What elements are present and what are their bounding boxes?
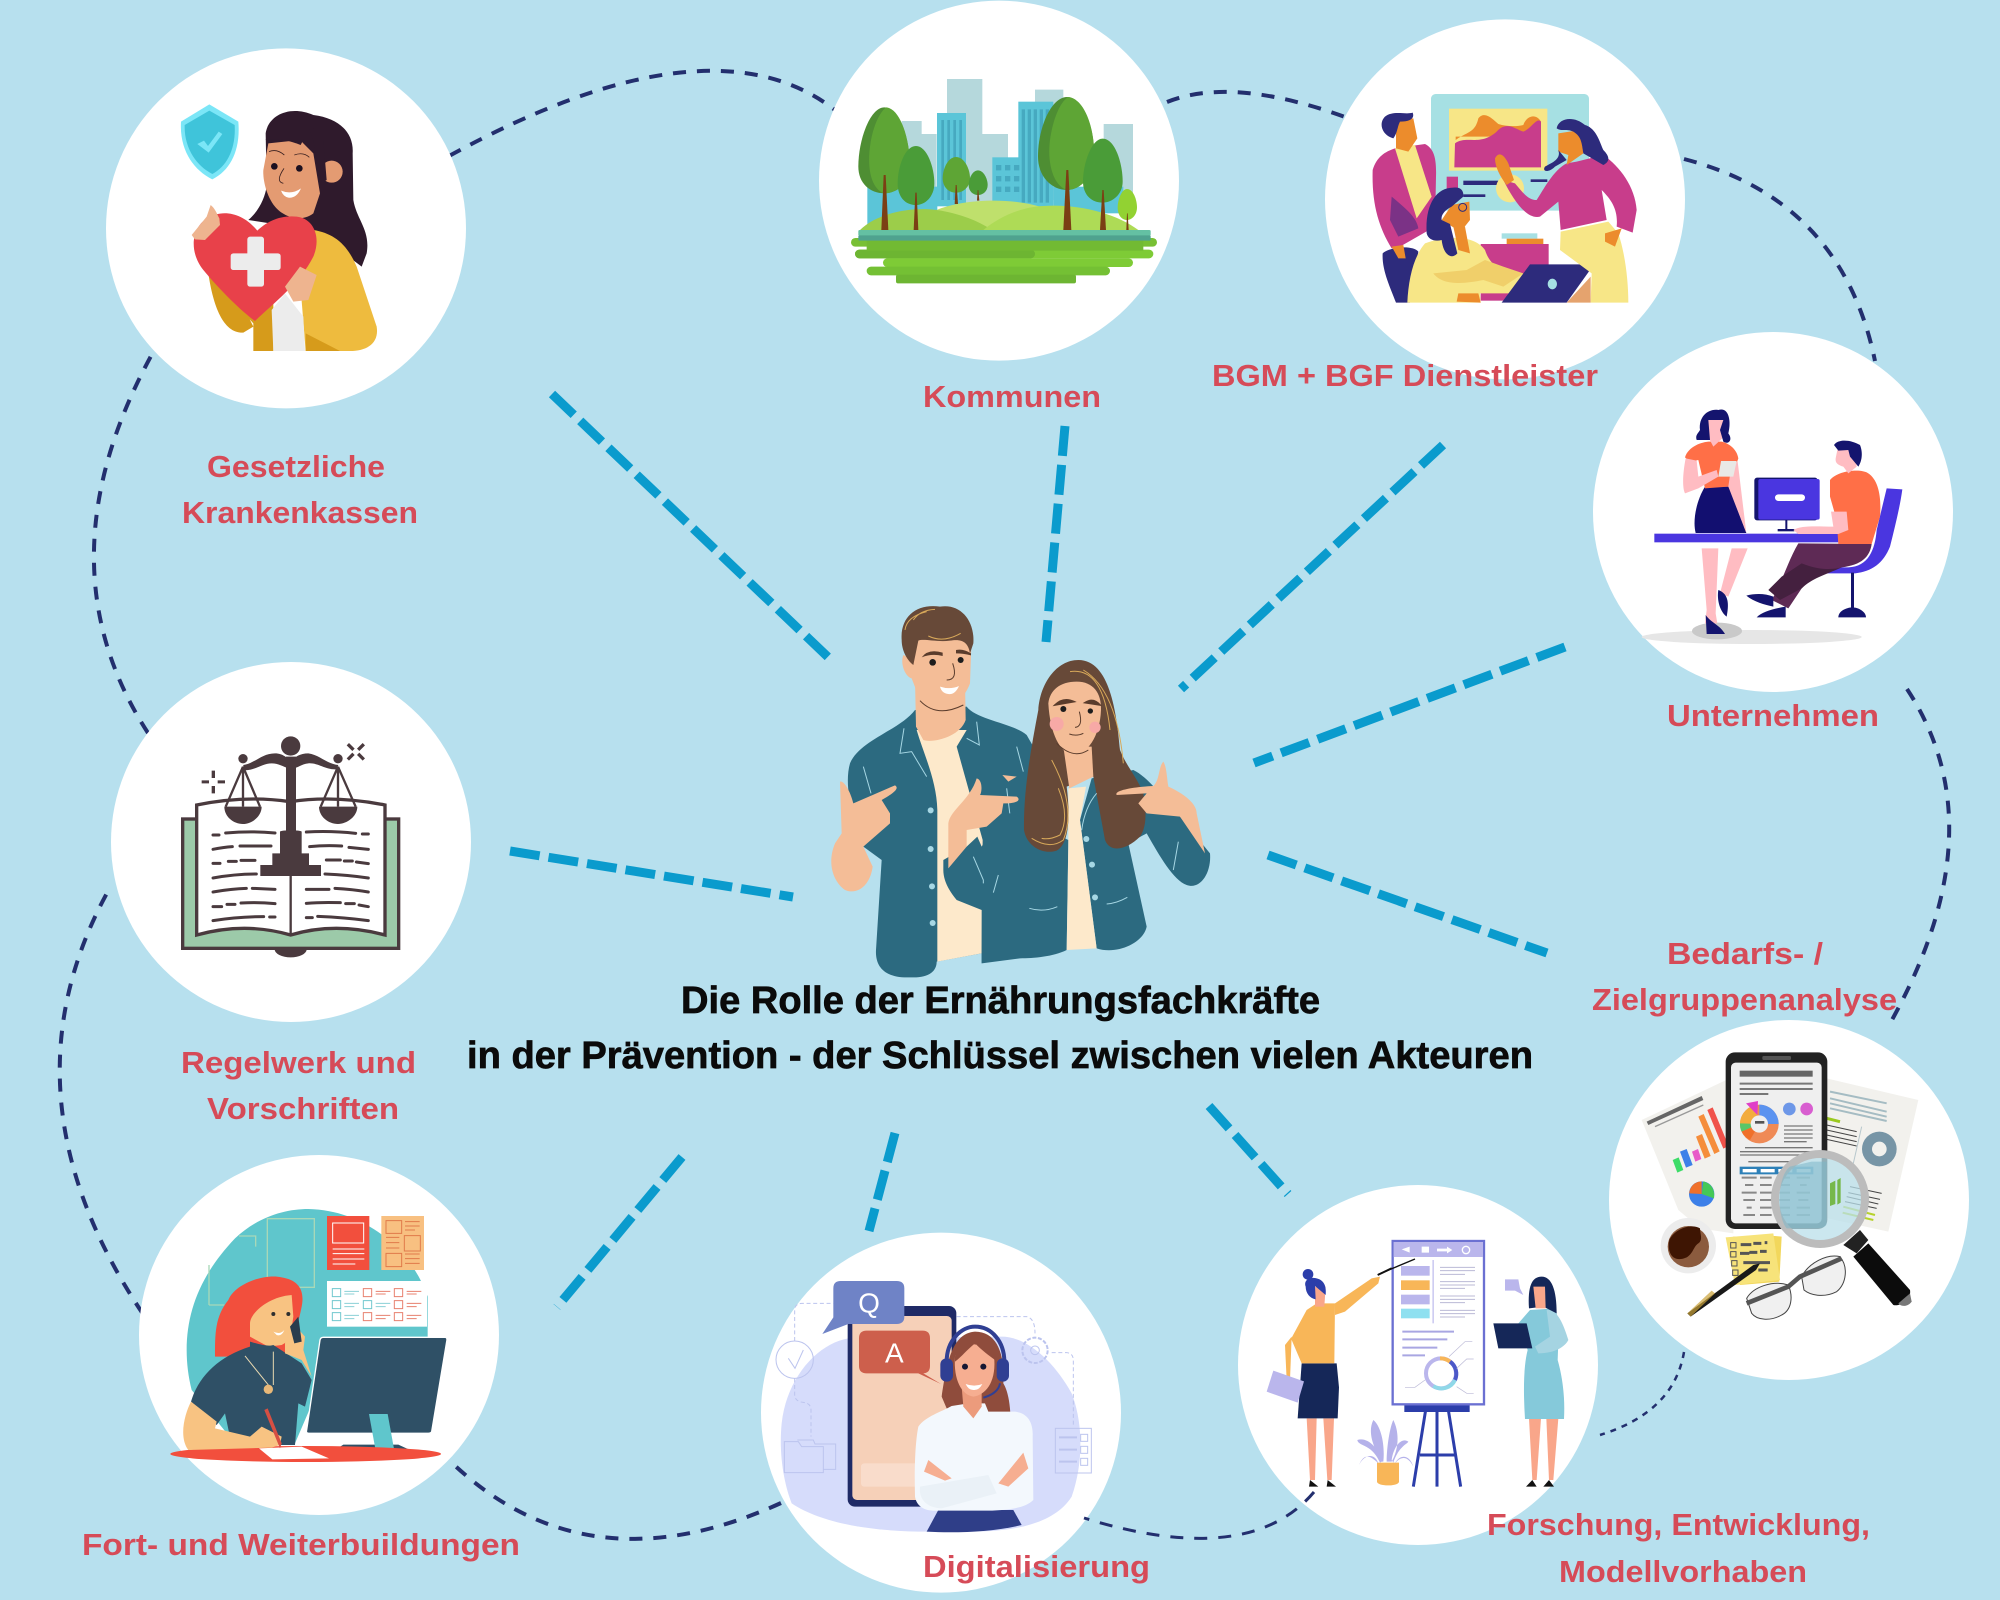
floor shadow (1642, 623, 1862, 644)
teal background blob (187, 1209, 428, 1443)
panel: Unternehmen illustration (1593, 332, 1953, 692)
label: Unternehmen: Unternehmen (1667, 698, 1879, 733)
label: Regelwerk und Vorschriften: Regelwerk und (181, 1045, 416, 1080)
panel: Digitalisierung illustration (761, 1233, 1121, 1593)
icon: shield with check (181, 104, 239, 179)
label: Bedarfs- / Zielgruppenanalyse: Zielgruppenanalyse (1592, 982, 1897, 1017)
dashed connector ring between actors (60, 71, 1949, 1314)
panel: Fort- und Weiterbildungen illustration (139, 1155, 499, 1515)
panel: Kommunen illustration (819, 1, 1179, 361)
label: Bedarfs- / Zielgruppenanalyse (1592, 936, 1897, 1017)
label: Forschung, Entwicklung, Modellvorhaben (1487, 1507, 1870, 1589)
title: in der Prävention - der Schlüssel zwischen vielen Akteuren (467, 1035, 1533, 1077)
colleague woman with laptop (1493, 1277, 1568, 1487)
desk and monitor (1654, 478, 1838, 542)
potted plant (1357, 1420, 1413, 1485)
pen (1687, 1263, 1760, 1317)
smartphone with Q and A bubbles (822, 1281, 956, 1507)
seated man on chair (1746, 441, 1902, 617)
panel: Forschung illustration (1238, 1185, 1598, 1545)
standing woman pointing (1495, 119, 1637, 303)
wall posters (327, 1216, 424, 1270)
label: Fort- und Weiterbuildungen: Fort- und Weiterbuildungen (82, 1527, 520, 1562)
smartphone with Q and A bubbles: Q (858, 1287, 880, 1318)
filing cabinet (1481, 233, 1549, 301)
label: Digitalisierung: Digitalisierung (923, 1549, 1150, 1584)
report sheet left (1642, 1077, 1733, 1233)
label: Forschung, Entwicklung, Modellvorhaben: Forschung, Entwicklung, (1487, 1507, 1870, 1542)
central couple illustration (831, 606, 1210, 977)
presentation screen with chart (1431, 94, 1589, 211)
trees (858, 97, 1137, 230)
label: Kommunen: Kommunen (923, 379, 1101, 414)
label: Gesetzliche Krankenkassen: Krankenkassen (182, 495, 418, 530)
workflow icons (776, 1303, 1091, 1473)
magnifying glass (1775, 1154, 1912, 1306)
label: Regelwerk und Vorschriften: Vorschriften (207, 1091, 399, 1126)
label: BGM + BGF Dienstleister: BGM + BGF Dienstleister (1212, 358, 1598, 393)
woman pointing (943, 660, 1210, 963)
sticky note (1726, 1233, 1782, 1285)
laptop (1502, 264, 1594, 303)
coffee cup (1661, 1218, 1716, 1273)
hills (860, 201, 1138, 230)
label: Regelwerk und Vorschriften (181, 1045, 416, 1126)
checklist board (327, 1281, 427, 1327)
presenter woman (1267, 1259, 1415, 1487)
standing man (1373, 113, 1436, 303)
man's pointing hand over jacket (948, 778, 1019, 868)
radial blue dashed rays from centre (510, 394, 1565, 1307)
panel: Gesetzliche Krankenkassen illustration (106, 48, 466, 408)
smartphone with Q and A bubbles: A (885, 1337, 904, 1368)
city buildings (867, 79, 1133, 227)
panel: BGM + BGF Dienstleister illustration (1325, 19, 1685, 379)
woman holding heart (192, 111, 377, 351)
monitor (306, 1337, 447, 1451)
phone with charts (1726, 1052, 1827, 1229)
dashed connectors drawn over circle edges (449, 1352, 1684, 1539)
flipchart (1393, 1241, 1484, 1487)
lavender background blob (781, 1337, 1080, 1532)
report sheet right (1820, 1078, 1918, 1232)
panel: Bedarfs- / Zielgruppenanalyse illustration (1609, 1020, 1969, 1380)
red desk (170, 1446, 441, 1462)
woman on phone (183, 1276, 312, 1450)
standing woman with tablet (1683, 409, 1748, 634)
label: Forschung, Entwicklung, Modellvorhaben: Modellvorhaben (1559, 1554, 1807, 1589)
label: Bedarfs- / Zielgruppenanalyse: Bedarfs- / (1667, 936, 1823, 971)
label: Gesetzliche Krankenkassen (182, 449, 418, 530)
seated woman with glasses (1407, 187, 1523, 303)
glasses (1747, 1256, 1845, 1319)
man pointing (831, 606, 1033, 977)
panel: Regelwerk und Vorschriften illustration (111, 662, 471, 1022)
icon: open law book (183, 736, 399, 957)
title: Die Rolle der Ernährungsfachkräfte (681, 980, 1320, 1022)
support agent with headset (915, 1327, 1033, 1532)
label: Gesetzliche Krankenkassen: Gesetzliche (207, 449, 385, 484)
title (467, 980, 1533, 1077)
ground strips (851, 230, 1157, 283)
